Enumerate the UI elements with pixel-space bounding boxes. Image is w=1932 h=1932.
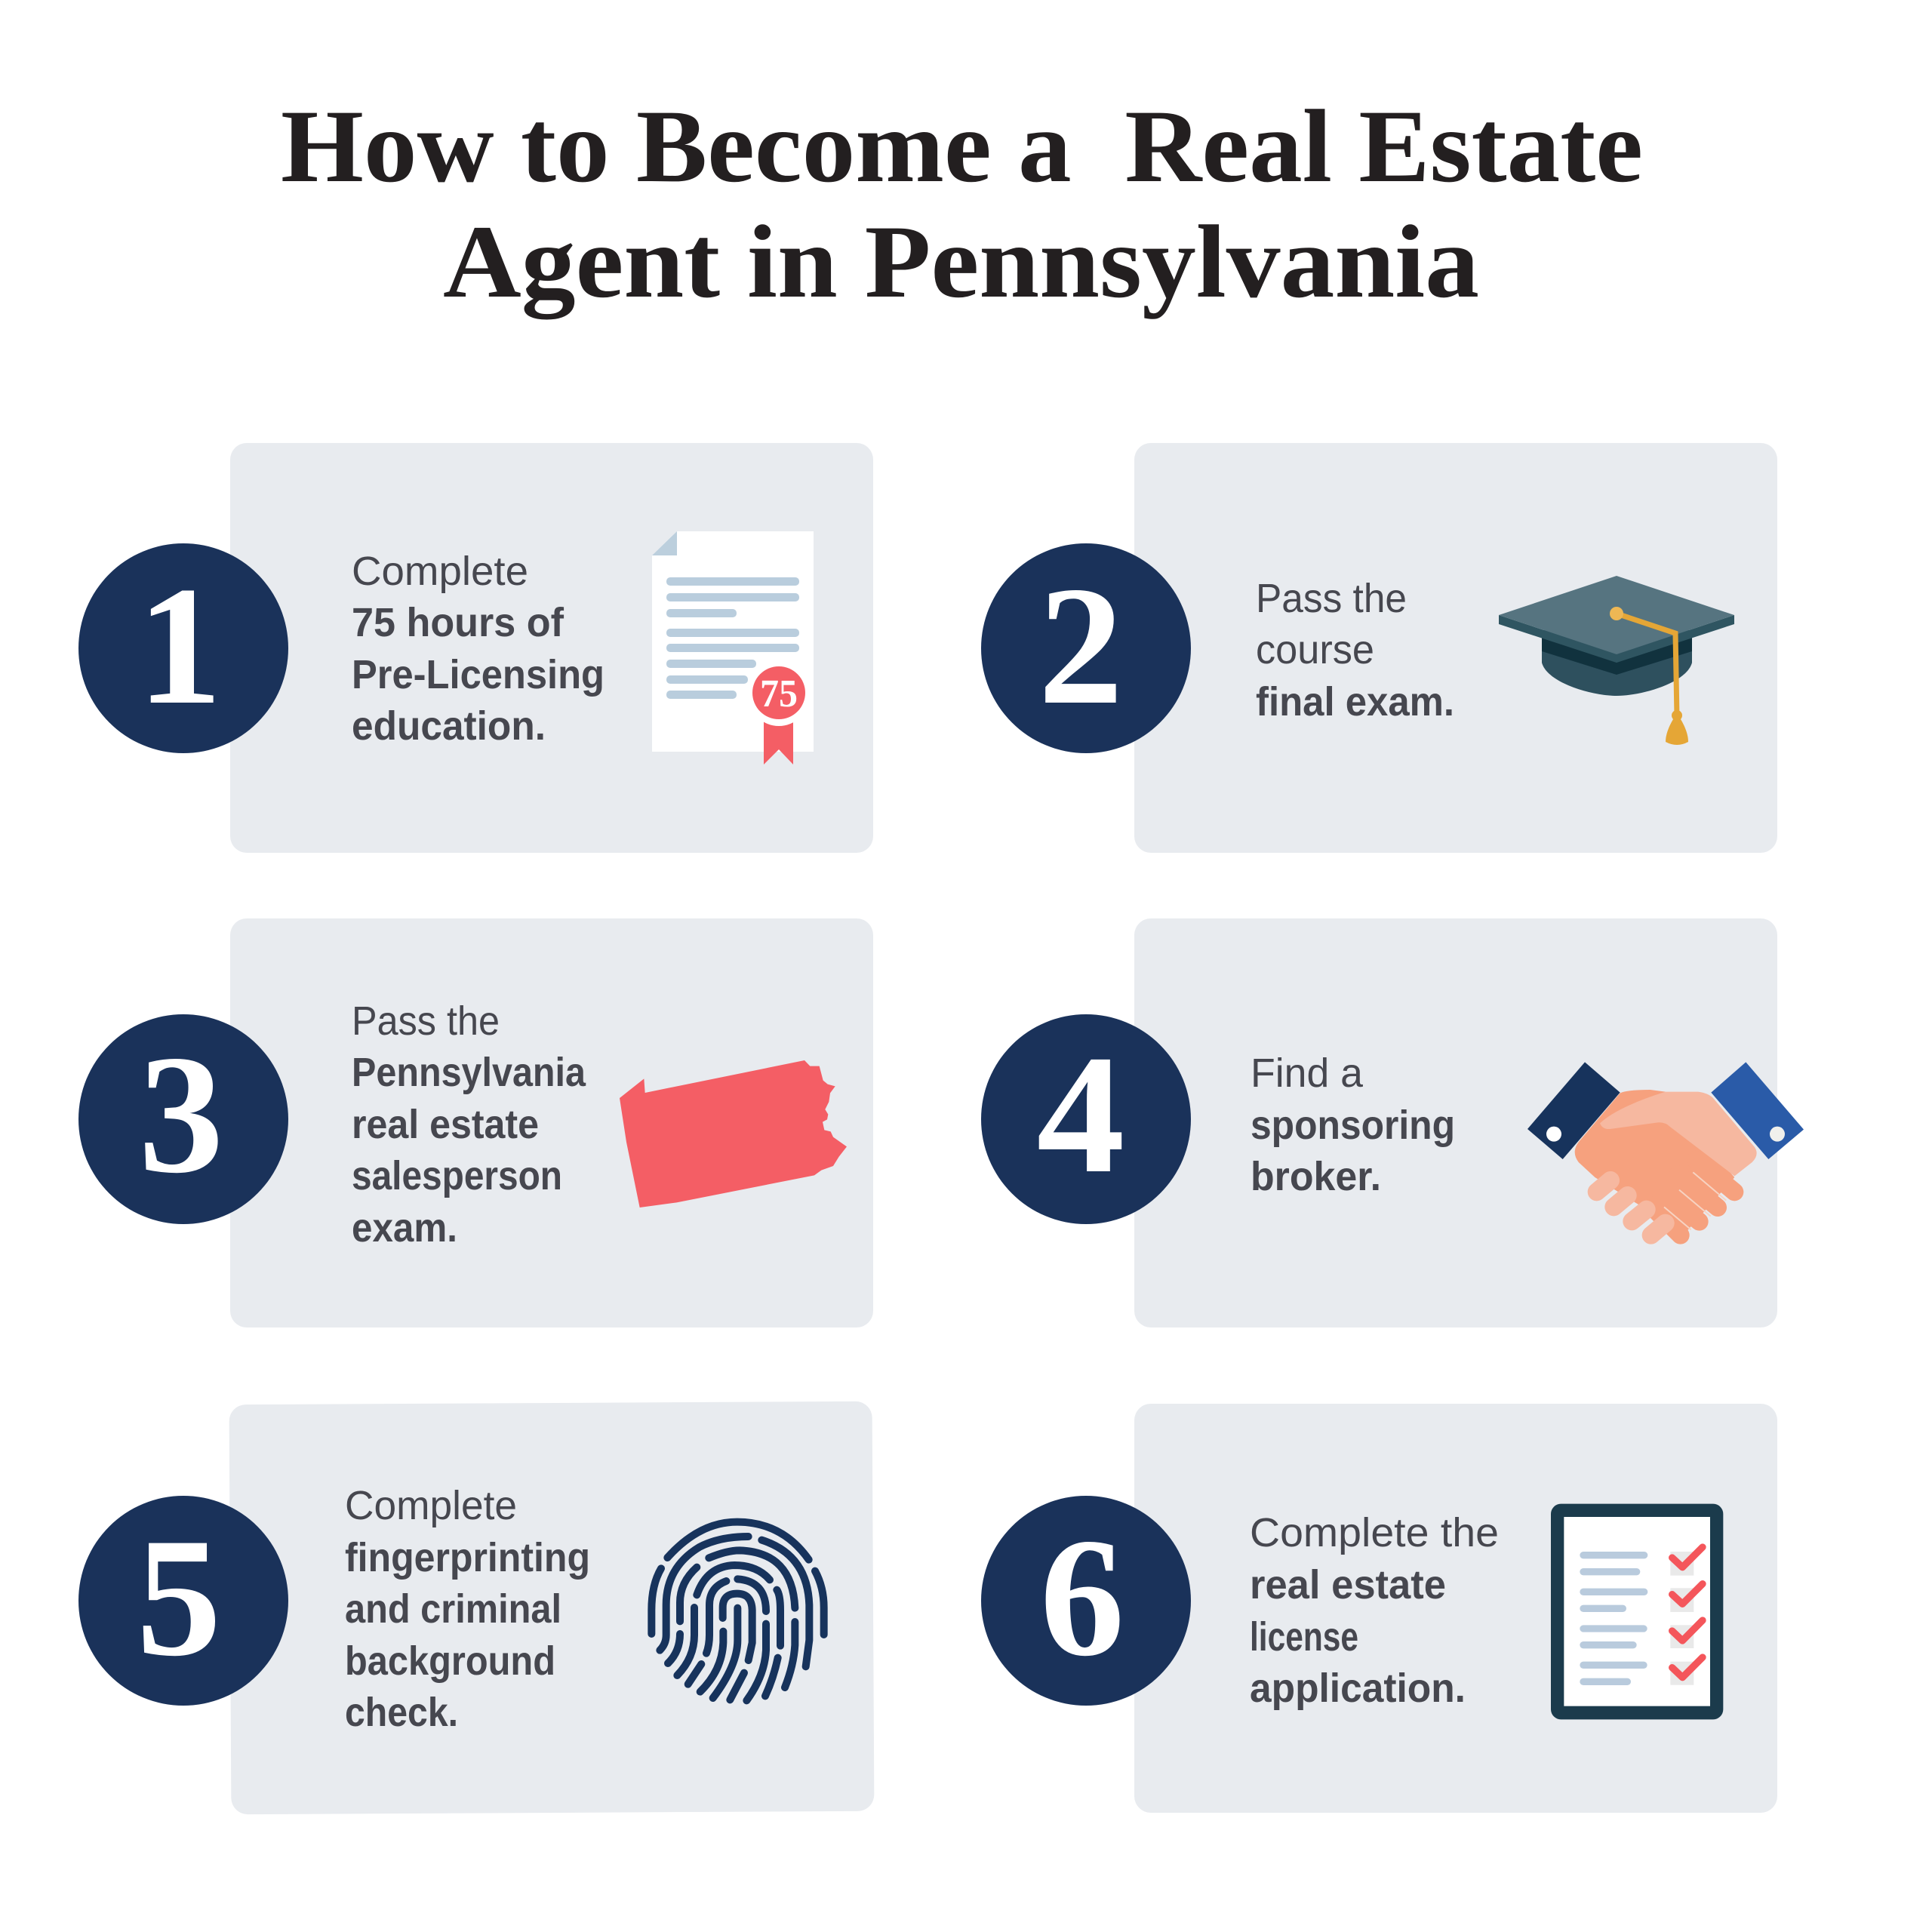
text: step 2: final exam. <box>1256 679 1454 724</box>
icon: checklist <box>1551 1504 1723 1719</box>
text: step 5 <box>345 1483 590 1735</box>
text: step 4: sponsoring <box>1251 1103 1455 1148</box>
text: step 2: course <box>1256 627 1374 672</box>
text: step 1: 75 hours of <box>352 600 565 645</box>
text: step 4: broker. <box>1251 1154 1381 1199</box>
text: step 4: Find a <box>1251 1051 1364 1096</box>
text: step 2 <box>1256 576 1454 724</box>
icon: graduation cap <box>1499 576 1734 745</box>
text: step 3: Pennsylvania <box>352 1050 586 1095</box>
text: step 6: application. <box>1250 1666 1466 1711</box>
text: step 2: Pass the <box>1256 576 1407 621</box>
title: Agent in Pennsylvania <box>443 204 1479 319</box>
text: step 3: real estate <box>352 1102 539 1147</box>
text: step 4 <box>1251 1051 1455 1199</box>
text: step 6: license <box>1250 1614 1358 1660</box>
text: step 1: education. <box>352 703 546 749</box>
text: step 1: Complete <box>352 549 528 594</box>
title: How to Become a Real Estate <box>281 88 1643 204</box>
panel: step 4 <box>981 918 1804 1327</box>
text: step 5: background <box>345 1638 555 1684</box>
text: step 3: exam. <box>352 1205 457 1251</box>
number badge 1 <box>78 543 288 753</box>
text: step 5: fingerprinting <box>345 1535 590 1580</box>
text: step 5: and criminal <box>345 1586 561 1632</box>
number badge 2 <box>981 543 1191 753</box>
panel: step 2 <box>981 443 1777 853</box>
text: step 1: Pre-Licensing <box>352 652 605 697</box>
number badge 4 <box>981 1014 1191 1224</box>
icon: handshake <box>1527 1062 1804 1235</box>
number badge 6 <box>981 1496 1191 1706</box>
panel: step 5 <box>78 1401 874 1814</box>
number badge 4: 4 <box>1037 1020 1124 1208</box>
number badge 5 <box>78 1496 288 1706</box>
text: step 6: Complete the <box>1250 1510 1499 1555</box>
text: step 3 <box>352 998 586 1251</box>
icon: certificate document <box>652 531 814 764</box>
text: step 6: real estate <box>1250 1562 1446 1607</box>
number badge 5: 5 <box>137 1503 221 1691</box>
text: step 1 <box>352 549 605 749</box>
text: step 6 <box>1250 1510 1499 1711</box>
panel: step 3 <box>78 918 873 1327</box>
text: step 3: Pass the <box>352 998 500 1044</box>
title <box>281 88 1643 319</box>
text: step 5: Complete <box>345 1483 517 1528</box>
number badge 3: 3 <box>139 1020 223 1208</box>
text: step 3: salesperson <box>352 1153 562 1198</box>
icon: Pennsylvania map <box>620 1060 847 1208</box>
number badge 2: 2 <box>1038 551 1123 740</box>
panel: step 6 <box>981 1404 1777 1813</box>
number badge 3 <box>78 1014 288 1224</box>
icon: fingerprint <box>651 1522 824 1700</box>
icon: certificate document: 75 <box>760 672 798 715</box>
text: step 5: check. <box>345 1690 458 1735</box>
number badge 1: 1 <box>137 551 222 740</box>
panel: step 1 <box>78 443 873 853</box>
number badge 6: 6 <box>1040 1503 1124 1691</box>
